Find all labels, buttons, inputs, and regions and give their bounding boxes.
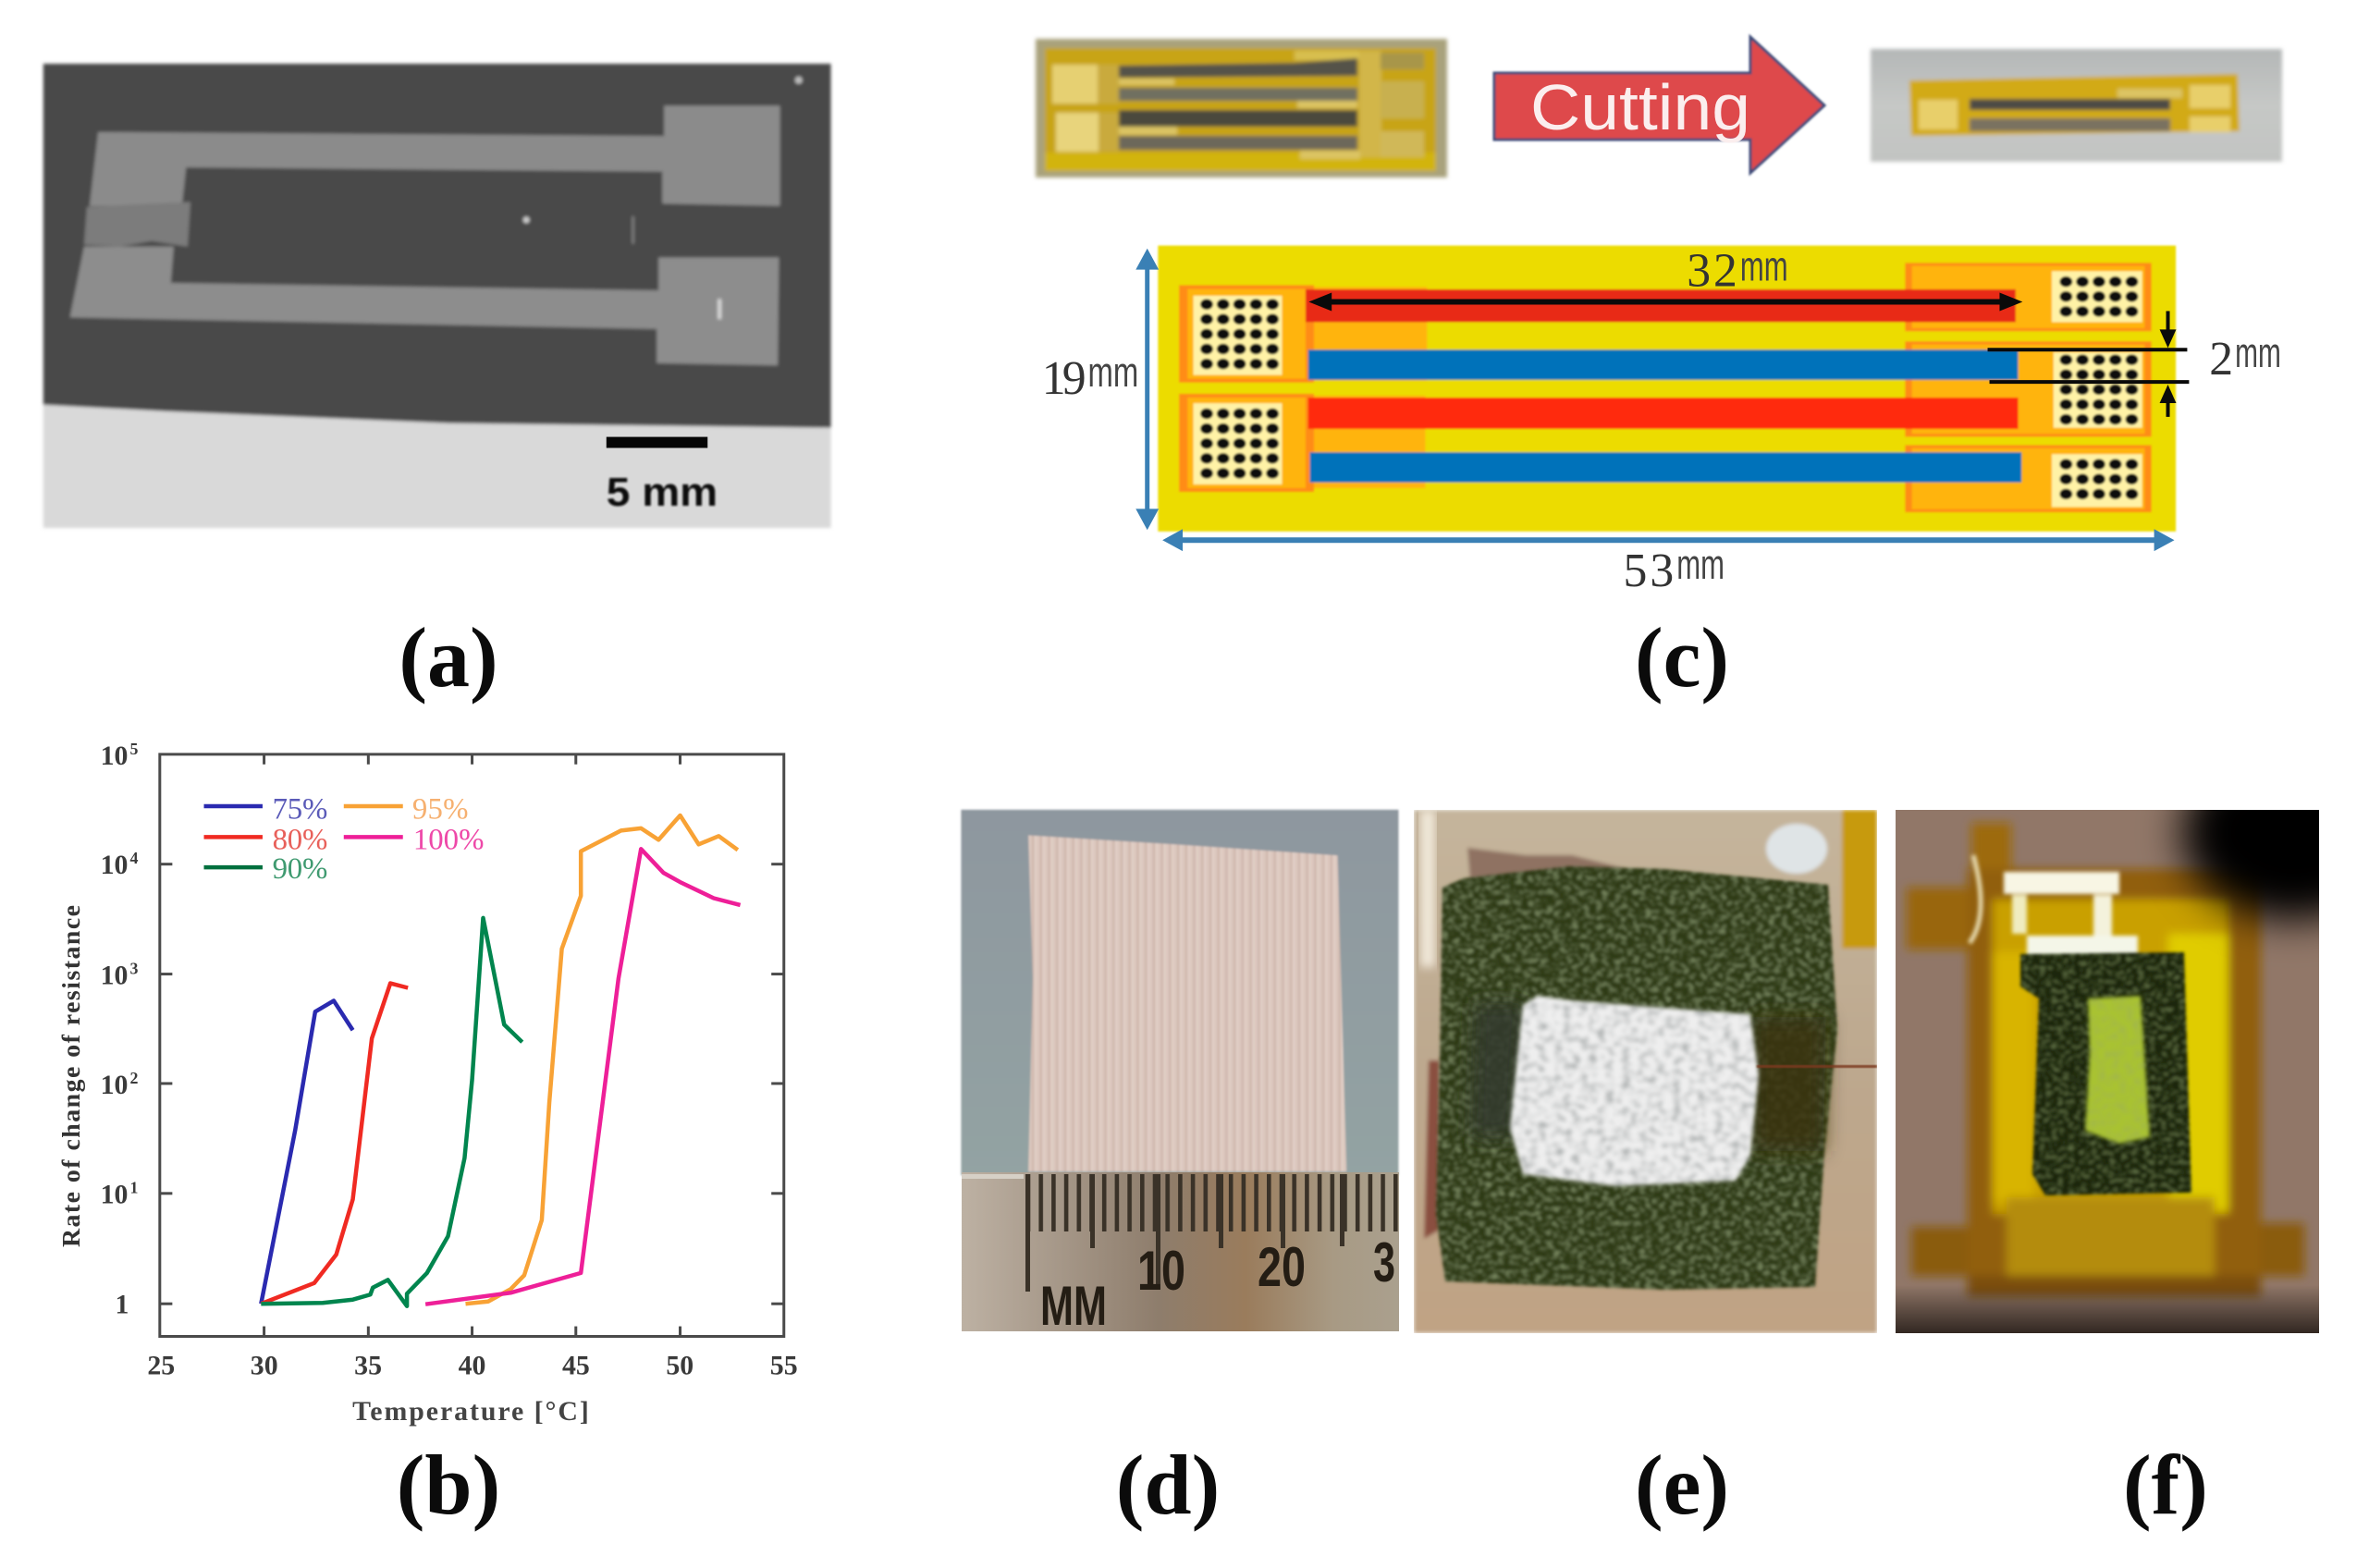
curve 95% bbox=[466, 815, 738, 1304]
label (e): (e) bbox=[1635, 1438, 1729, 1532]
y axis tick labels: 10 bbox=[101, 1179, 128, 1209]
dimension: 2 label: 2 bbox=[2209, 333, 2233, 386]
electrode strips bbox=[1306, 289, 2021, 483]
dimension arrow: 53 mm bbox=[1162, 529, 2174, 551]
arrow caption: Cutting bbox=[1530, 71, 1750, 143]
curve 100% bbox=[425, 849, 741, 1305]
dimension: 53 label: mm bbox=[1676, 541, 1725, 588]
y axis tick labels: 10 bbox=[101, 1070, 128, 1100]
y axis tick labels: 5 bbox=[129, 740, 138, 758]
arrow: cutting bbox=[1494, 37, 1824, 173]
y axis tick labels: 10 bbox=[101, 961, 128, 991]
bright streak at left edge bbox=[1420, 810, 1435, 967]
wire bbox=[1757, 1065, 1877, 1068]
legend labels: 80% bbox=[273, 823, 327, 856]
x axis tick labels: 50 bbox=[666, 1350, 694, 1380]
bottom shadow bbox=[1896, 1285, 2319, 1333]
ruler bbox=[962, 1172, 1399, 1337]
dark corner bbox=[2182, 744, 2369, 920]
label (d): (d) bbox=[1116, 1438, 1220, 1532]
dimension: 32 label: 32 bbox=[1687, 245, 1737, 298]
dimension: 53 label: 53 bbox=[1624, 545, 1674, 597]
right contact pads bbox=[1909, 264, 2148, 510]
curve 80% bbox=[261, 984, 408, 1304]
x axis title: Temperature [°C] bbox=[352, 1396, 589, 1427]
y axis tick labels: 10 bbox=[101, 741, 128, 771]
photo: uncut sensor sheet bbox=[1036, 39, 1447, 178]
ruler numbers bbox=[1040, 1231, 1395, 1337]
x axis tick labels: 30 bbox=[251, 1350, 278, 1380]
y axis tick labels: 2 bbox=[129, 1069, 138, 1087]
y axis tick labels bbox=[101, 740, 138, 1320]
white coated patch bbox=[1510, 996, 1759, 1186]
dimension: 32 label: mm bbox=[1740, 243, 1788, 290]
dark green fabric bbox=[1436, 866, 1837, 1290]
dimension marker: 2 mm bbox=[1988, 311, 2189, 417]
x axis tick labels: 45 bbox=[562, 1350, 590, 1380]
panel a: photo of printed sensor on dark substrate bbox=[43, 64, 831, 528]
label (a): (a) bbox=[399, 610, 498, 704]
ruler numbers: 10 bbox=[1137, 1240, 1185, 1302]
dimension: 2 label bbox=[2209, 329, 2281, 386]
x axis tick labels: 35 bbox=[354, 1350, 382, 1380]
ruler numbers: 20 bbox=[1258, 1236, 1306, 1298]
curve 90% bbox=[261, 918, 522, 1306]
fabric swatch bbox=[1028, 835, 1346, 1171]
x axis tick labels bbox=[147, 1350, 798, 1380]
legend labels: 90% bbox=[273, 852, 327, 886]
x axis tick labels: 25 bbox=[147, 1350, 175, 1380]
illuminated patch bbox=[2085, 996, 2150, 1144]
y axis tick labels: 10 bbox=[101, 850, 128, 880]
curve 75% bbox=[261, 1000, 353, 1304]
label (f): (f) bbox=[2123, 1438, 2208, 1532]
dimension: 32 label bbox=[1687, 243, 1788, 298]
y axis tick labels: 1 bbox=[116, 1290, 129, 1320]
scale label: 5 mm bbox=[607, 470, 718, 515]
y axis title: Rate of change of resistance bbox=[57, 905, 86, 1247]
dimension arrow: 32 mm bbox=[1308, 293, 2022, 311]
photo: cut sensor bbox=[1871, 49, 2282, 162]
legend labels: 75% bbox=[273, 792, 327, 826]
y axis tick labels: 1 bbox=[129, 1178, 138, 1196]
y axis tick labels: 3 bbox=[129, 960, 138, 978]
panel c bottom: sensor layout schematic bbox=[1042, 243, 2281, 597]
adhesive white residue bbox=[1970, 855, 2138, 960]
panel d: fabric sample on ruler bbox=[961, 810, 1399, 1337]
legend lines bbox=[204, 806, 403, 867]
dark green fabric bbox=[2020, 952, 2191, 1195]
label (b): (b) bbox=[397, 1438, 500, 1532]
scale bar bbox=[607, 437, 707, 447]
ruler numbers: MM bbox=[1040, 1275, 1107, 1337]
x axis tick labels: 40 bbox=[459, 1350, 485, 1380]
dimension: 2 label: mm bbox=[2235, 329, 2281, 376]
panel f: encapsulated fabric sensor bbox=[1896, 744, 2369, 1333]
dimension: 19 label bbox=[1042, 349, 1138, 405]
left contact pads bbox=[1184, 287, 1427, 490]
dimension arrow: 19 mm bbox=[1135, 249, 1159, 530]
legend labels: 100% bbox=[413, 823, 484, 856]
dimension: 19 label: 19 bbox=[1042, 352, 1086, 405]
label (c): (c) bbox=[1635, 610, 1729, 704]
dimension: 53 label bbox=[1624, 541, 1725, 597]
ruler numbers: 3 bbox=[1373, 1231, 1395, 1293]
panel b: resistance versus temperature chart bbox=[57, 740, 798, 1427]
panel e: coated fabric with white patch bbox=[1414, 810, 1877, 1333]
legend labels: 95% bbox=[412, 792, 469, 826]
x axis tick labels: 55 bbox=[770, 1350, 798, 1380]
dimension: 19 label: mm bbox=[1088, 349, 1138, 396]
shaded area beside patch bbox=[1470, 1003, 1826, 1151]
legend labels bbox=[273, 792, 484, 886]
panel c top: cutting process bbox=[1036, 37, 2282, 178]
y axis tick labels: 4 bbox=[129, 849, 138, 867]
